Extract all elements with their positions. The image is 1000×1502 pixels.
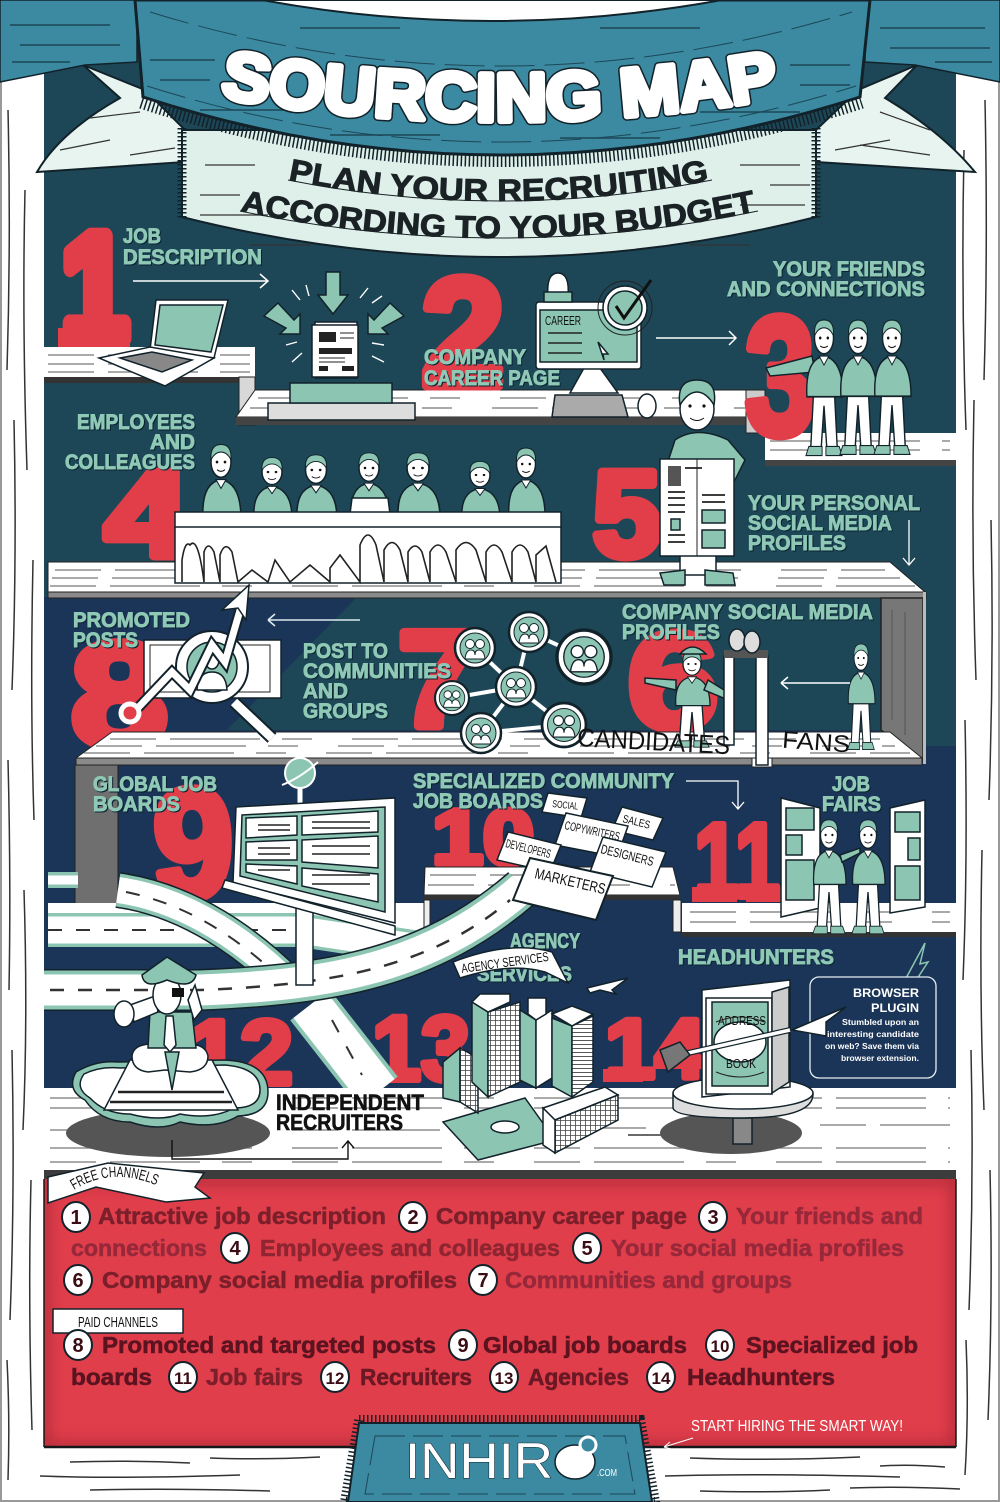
item 2 badge: 2 <box>407 1207 419 1229</box>
ribbon: agency services: AGENCY SERVICES <box>460 949 550 976</box>
heading: specialized community job boards: JOB BOARDS <box>413 790 543 813</box>
heading: headhunters: HEADHUNTERS <box>678 946 834 969</box>
heading: post to communities and groups: POST TO <box>303 640 388 663</box>
arrow: career page to friends <box>656 331 736 345</box>
heading: promoted posts: POSTS <box>73 629 138 652</box>
list: paid channels: Job fairs <box>206 1364 303 1390</box>
roads <box>44 880 522 1092</box>
icon: airplane <box>587 978 628 994</box>
number 14: 14 <box>605 1002 705 1096</box>
logo tab: Inhiro: INHIR <box>405 1433 553 1489</box>
background panel: dark teal <box>44 0 956 1180</box>
illustration: address book on pedestal: BOOK <box>726 1056 756 1071</box>
number 4: 4 <box>105 446 189 582</box>
item 9 badge: 9 <box>457 1335 469 1357</box>
ribbon: subtitle banner <box>143 97 860 257</box>
arrow: cloud to recruiters <box>172 1140 354 1159</box>
heading: post to communities and groups: AND <box>303 680 348 703</box>
icon: career page monitor with alarm and clock: CAREER <box>545 313 581 328</box>
arrow: post to communities toward promoted <box>268 614 360 626</box>
heading: company social media profiles: COMPANY SOCIAL MEDIA <box>622 601 873 624</box>
heading: employees and colleagues <box>65 411 195 474</box>
heading: agency services: AGENCY <box>510 930 580 953</box>
number 7: 7 <box>398 603 478 755</box>
item 9 badge <box>449 1330 477 1360</box>
callout: browser plugin: PLUGIN <box>871 1001 919 1015</box>
heading: global job boards: BOARDS <box>93 793 180 816</box>
ribbon: agency services <box>453 948 568 983</box>
item 4 badge <box>221 1233 249 1263</box>
item 10 badge: 10 <box>711 1337 729 1356</box>
heading: post to communities and groups: COMMUNITIES <box>303 660 451 683</box>
number 10: 10 <box>432 793 534 881</box>
heading: company career page: COMPANY <box>424 346 526 369</box>
heading: employees and colleagues: AND <box>150 431 195 454</box>
item 12 badge <box>321 1362 349 1392</box>
item 13 badge: 13 <box>495 1369 513 1388</box>
heading: job description: JOB <box>123 225 161 248</box>
heading: specialized community job boards <box>413 770 674 813</box>
title: SOURCING MAP <box>219 48 777 126</box>
illustration: specialized job board cards: DEVELOPERS <box>504 836 552 861</box>
number 5: 5 <box>593 446 661 582</box>
floor of section 6-8 <box>76 732 922 767</box>
list: free channels: Your friends and <box>736 1203 923 1229</box>
ribbon: teal side bands <box>0 0 1000 82</box>
number 6: 6 <box>628 605 718 757</box>
illustration: specialized job board cards: SOCIAL <box>552 799 579 813</box>
item 5 badge: 5 <box>581 1238 593 1260</box>
callout: browser plugin <box>792 943 936 1078</box>
item 1 badge: 1 <box>70 1207 82 1229</box>
callout: browser plugin: on web? Save them via <box>825 1042 920 1051</box>
item 6 badge: 6 <box>72 1270 84 1292</box>
heading: job fairs: JOB <box>832 773 870 796</box>
item 7 badge <box>469 1265 497 1295</box>
number 11: 11 <box>694 802 780 920</box>
subtitle <box>240 158 758 239</box>
number 8: 8 <box>71 613 168 778</box>
subtitle: ACCORDING TO YOUR BUDGET <box>240 190 753 239</box>
item 13 badge <box>490 1362 518 1392</box>
heading: job fairs <box>822 773 881 816</box>
right ledge: job fairs floor <box>682 903 956 937</box>
list: free channels: Company social media profiles <box>102 1267 457 1293</box>
heading: global job boards: GLOBAL JOB <box>93 773 217 796</box>
list: free channels: Your social media profiles <box>611 1235 904 1261</box>
item 4 badge: 4 <box>229 1238 241 1260</box>
logo tab: Inhiro <box>345 1420 655 1502</box>
heading: independent recruiters <box>276 1090 425 1135</box>
heading: employees and colleagues: EMPLOYEES <box>77 411 195 434</box>
callout: browser plugin: browser extension. <box>841 1054 919 1063</box>
item 8 badge: 8 <box>72 1335 84 1357</box>
illustration: specialized job board cards: DESIGNERS <box>599 841 656 869</box>
floor labels: candidates and fans <box>577 722 851 760</box>
item 1 badge <box>62 1202 90 1232</box>
heading: your personal social media profiles: SOCIAL MEDIA <box>748 512 892 535</box>
top ledge: steps 1 to 3 <box>44 347 956 466</box>
number 13: 13 <box>372 998 470 1100</box>
arrow: city to pedestal <box>628 1128 688 1142</box>
list: paid channels: Agencies <box>528 1364 629 1390</box>
gray wall right <box>881 592 926 764</box>
heading: promoted posts: PROMOTED <box>73 609 190 632</box>
upper ledge left of lower section <box>48 903 424 945</box>
arrow: profiles down <box>903 520 915 565</box>
number 1: 1 <box>62 205 128 370</box>
middle ledge <box>48 562 926 598</box>
list: paid channels <box>64 1330 918 1392</box>
heading: independent recruiters: INDEPENDENT <box>276 1090 425 1115</box>
ribbon: free channels: FREE CHANNELS <box>70 1166 159 1190</box>
illustration: specialized job board cards: MARKETERS <box>533 865 607 898</box>
item 3 badge <box>699 1202 727 1232</box>
list: paid channels: Recruiters <box>360 1364 472 1390</box>
heading: agency services: SERVICES <box>477 963 572 986</box>
heading: global job boards <box>93 773 217 816</box>
heading: your friends and connections: YOUR FRIENDS <box>773 258 925 281</box>
item 7 badge: 7 <box>477 1270 489 1292</box>
floor labels: candidates and fans: CANDIDATES <box>577 722 731 760</box>
arrow: candidate to gate <box>781 677 850 689</box>
item 11 badge: 11 <box>174 1369 192 1388</box>
illustration: city buildings <box>443 994 618 1160</box>
item 14 badge <box>647 1362 675 1392</box>
ribbon: free channels <box>47 1162 212 1204</box>
icon: laptop <box>99 300 228 386</box>
item 12 badge: 12 <box>326 1369 344 1388</box>
illustration: dollar bill, magnifier and rising arrow <box>121 585 281 738</box>
heading: company social media profiles: PROFILES <box>622 621 720 644</box>
list: free channels: connections <box>71 1235 207 1261</box>
callout: browser plugin: Stumbled upon an <box>842 1018 919 1027</box>
label: paid channels: PAID CHANNELS <box>78 1314 158 1331</box>
list: paid channels: Headhunters <box>687 1364 835 1390</box>
illustration: specialized job board cards <box>497 793 666 920</box>
background region: navy lower section <box>44 597 956 1180</box>
item 14 badge: 14 <box>652 1369 671 1388</box>
heading: agency services <box>477 930 580 986</box>
heading: your personal social media profiles: PROFILES <box>748 532 846 555</box>
illustration: guard at gate <box>645 629 768 765</box>
heading: your personal social media profiles: YOUR PERSONAL <box>748 492 920 515</box>
label: paid channels <box>53 1309 183 1333</box>
heading: company career page <box>424 346 560 390</box>
title: SOURCING MAP <box>220 50 776 124</box>
heading: company career page: CAREER PAGE <box>424 367 560 390</box>
item 10 badge <box>706 1330 734 1360</box>
number 12: 12 <box>187 1002 293 1104</box>
callout: browser plugin: interesting candidate <box>827 1030 920 1039</box>
illustration: address book on pedestal: ADDRESS <box>718 1013 766 1028</box>
item 11 badge <box>169 1362 197 1392</box>
item 2 badge <box>399 1202 427 1232</box>
heading: specialized community job boards: SPECIALIZED COMMUNITY <box>413 770 674 793</box>
tagline: start hiring the smart way: START HIRING THE SMART WAY! <box>691 1418 903 1435</box>
heading: independent recruiters: RECRUITERS <box>276 1110 403 1135</box>
heading: company social media profiles <box>622 601 873 644</box>
item 8 badge <box>64 1330 92 1360</box>
illustration: recruiter on cloud with telescope <box>66 957 270 1157</box>
heading: post to communities and groups: GROUPS <box>303 700 388 723</box>
illustration: specialized job board cards: SALES <box>621 813 651 832</box>
heading: your personal social media profiles <box>748 492 920 555</box>
illustration: specialized job board cards: COPYWRITERS <box>563 818 621 844</box>
item 5 badge <box>573 1233 601 1263</box>
heading: your friends and connections: AND CONNECTIONS <box>727 278 925 301</box>
arrow: job description to document <box>133 274 268 288</box>
heading: post to communities and groups <box>303 640 451 723</box>
list: free channels: Employees and colleagues <box>260 1235 560 1261</box>
platform under number 10 <box>424 867 681 935</box>
banner: main title band <box>135 0 870 155</box>
list: paid channels: Promoted and targeted posts <box>102 1332 436 1358</box>
illustration: seven colleagues at table <box>175 444 561 583</box>
heading: job description <box>123 225 262 269</box>
list: free channels: Communities and groups <box>505 1267 792 1293</box>
bottom floor <box>44 1088 956 1179</box>
illustration: candidate <box>848 644 875 750</box>
item 6 badge <box>64 1265 92 1295</box>
callout: browser plugin: BROWSER <box>853 986 919 1000</box>
icon: job description document on platform <box>264 272 415 420</box>
illustration: job board billboard and globe <box>222 758 395 985</box>
list: paid channels: boards <box>71 1364 152 1390</box>
illustration: community network <box>435 612 611 753</box>
tagline: start hiring the smart way <box>664 1418 903 1449</box>
icon: career page monitor with alarm and clock <box>536 273 656 418</box>
list: paid channels: Specialized job <box>746 1332 918 1358</box>
heading: your friends and connections <box>727 258 925 301</box>
number 3: 3 <box>745 282 815 470</box>
panel: channels list <box>44 1179 956 1447</box>
floor labels: candidates and fans: FANS <box>781 727 851 758</box>
heading: job description: DESCRIPTION <box>123 246 262 269</box>
illustration: three friends <box>766 320 911 456</box>
ribbon: white tails behind banner <box>37 65 975 172</box>
list: free channels <box>62 1202 923 1295</box>
list: free channels: Attractive job description <box>98 1203 386 1229</box>
item 3 badge: 3 <box>707 1207 719 1229</box>
heading: job fairs: FAIRS <box>822 793 881 816</box>
subtitle: PLAN YOUR RECRUITING <box>290 158 708 202</box>
illustration: man holding CV <box>660 380 745 585</box>
number 9: 9 <box>153 757 233 930</box>
illustration: address book on pedestal <box>660 980 813 1154</box>
number 2: 2 <box>421 246 505 419</box>
heading: employees and colleagues: COLLEAGUES <box>65 451 195 474</box>
arrow: specialized boards to job fairs <box>686 781 744 809</box>
list: free channels: Company career page <box>436 1203 687 1229</box>
list: paid channels: Global job boards <box>483 1332 687 1358</box>
heading: promoted posts <box>73 609 190 652</box>
left gray wall lower section <box>75 765 118 915</box>
illustration: job fair banners and people <box>781 798 925 934</box>
logo tab: Inhiro: .COM <box>597 1468 617 1479</box>
